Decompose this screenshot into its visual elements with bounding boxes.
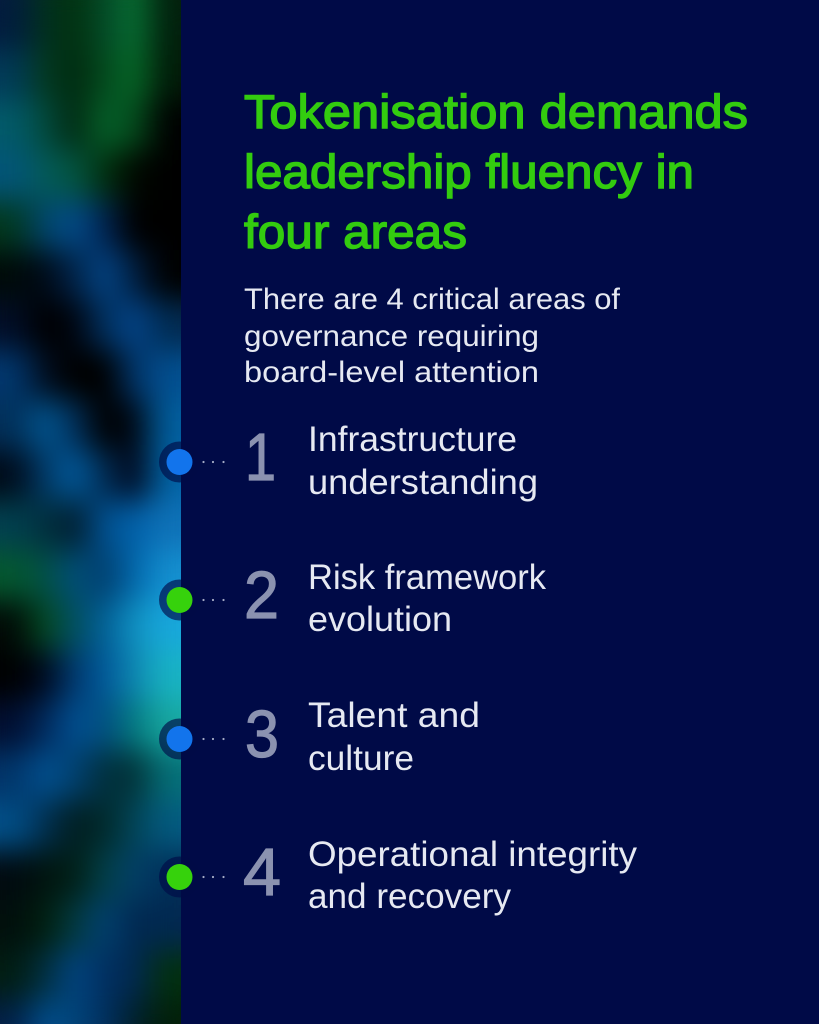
number 1: 1 (245, 420, 276, 495)
connector dots 4 (202, 876, 225, 878)
label 2: Risk framework (308, 558, 546, 597)
label 1 (308, 420, 538, 502)
panel: blurred light image (0, 0, 181, 1024)
connector dots 1 (202, 461, 225, 463)
label 1: understanding (308, 463, 538, 502)
item 1: infrastructure understanding (159, 420, 538, 502)
title: Tokenisation demands (244, 85, 748, 138)
connector dots 3 (202, 738, 225, 740)
label 3: culture (308, 739, 414, 778)
icon: green timeline dot (159, 856, 200, 898)
item 3: talent and culture (159, 696, 480, 778)
label 2 (308, 558, 546, 639)
icon: green timeline dot (159, 580, 200, 620)
label 4: Operational integrity (308, 835, 638, 874)
number 4: 4 (243, 835, 281, 910)
item 4: operational integrity and recovery (159, 835, 638, 916)
title (244, 85, 748, 258)
subtitle text: There are 4 critical areas of (244, 283, 621, 316)
number 3: 3 (245, 697, 279, 772)
label 3: Talent and (308, 696, 480, 735)
label 4: and recovery (308, 877, 512, 916)
item 2: risk framework evolution (159, 558, 546, 639)
label 1: Infrastructure (308, 420, 517, 459)
label 2: evolution (308, 600, 452, 639)
label 3 (308, 696, 480, 778)
icon: blue timeline dot (159, 718, 200, 760)
label 4 (308, 835, 638, 916)
number 2: 2 (244, 558, 279, 633)
connector dots 2 (202, 599, 225, 601)
title: leadership fluency in (244, 145, 694, 198)
subtitle text: governance requiring (244, 320, 539, 353)
subtitle text (244, 283, 621, 389)
title: four areas (244, 205, 467, 258)
subtitle text: board-level attention (244, 356, 539, 389)
icon: blue timeline dot (159, 442, 200, 482)
